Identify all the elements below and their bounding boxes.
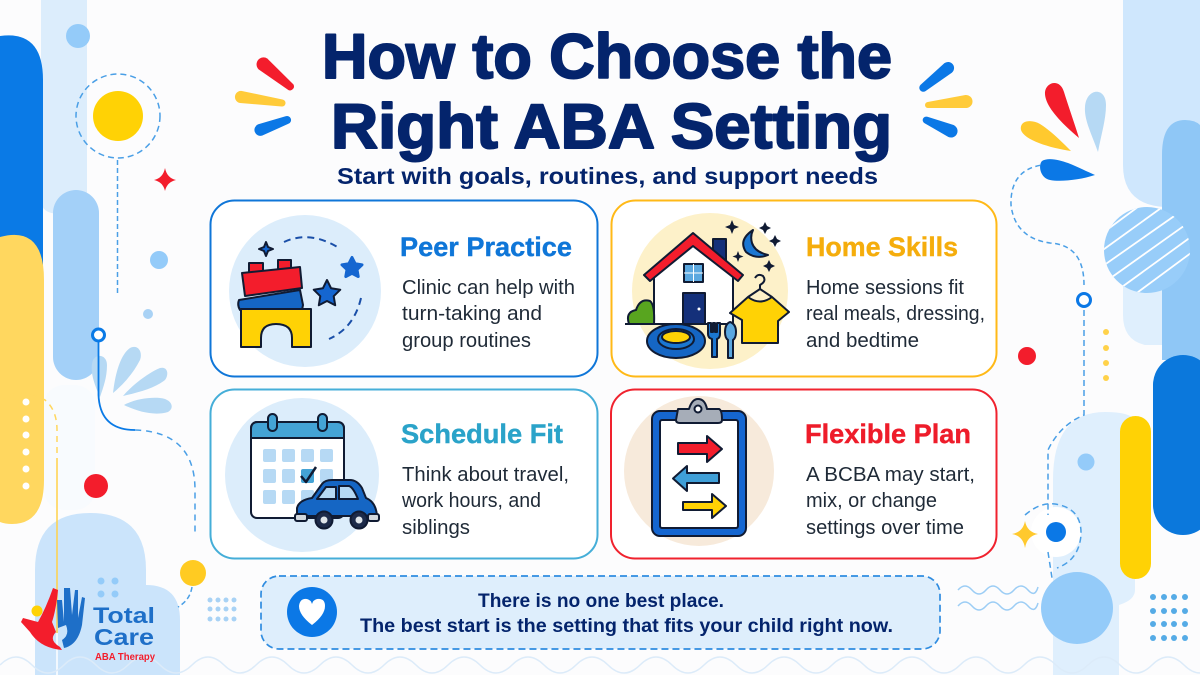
- callout text: [360, 590, 893, 637]
- logo: Total Care ABA Therapy: [21, 588, 155, 663]
- body text: mix, or change: [806, 490, 937, 512]
- body text: [806, 277, 985, 352]
- heading: Flexible Plan: [805, 419, 971, 449]
- body text: turn-taking and: [402, 303, 542, 325]
- body text: [401, 464, 569, 539]
- logo: Total Care ABA Therapy: ABA Therapy: [95, 652, 155, 663]
- panel: home skills: [612, 200, 996, 376]
- body text: Think about travel,: [402, 464, 569, 486]
- body text: [806, 464, 975, 539]
- title: Right ABA Setting: [331, 92, 892, 162]
- heading: Peer Practice: [400, 232, 572, 262]
- icon: toy blocks and stars: [229, 215, 381, 367]
- heading: Home Skills: [806, 232, 958, 262]
- callout banner: [261, 576, 940, 649]
- icon: calendar and car: [225, 398, 379, 552]
- panel: flexible plan: [611, 390, 996, 558]
- heading: Schedule Fit: [401, 419, 563, 449]
- bottom wave decoration: [0, 657, 1200, 673]
- icon: left burst: [235, 57, 294, 136]
- title: How to Choose the: [322, 22, 892, 92]
- subtitle: Start with goals, routines, and support needs: [337, 163, 878, 189]
- logo: Total Care ABA Therapy: Total: [93, 603, 155, 628]
- icon: house with meal and shirt: [625, 213, 789, 369]
- right background shapes: [958, 0, 1200, 675]
- body text: Home sessions fit: [806, 277, 964, 299]
- callout text: There is no one best place.: [478, 590, 724, 612]
- body text: A BCBA may start,: [806, 464, 975, 486]
- body text: [402, 277, 575, 352]
- panel: peer practice: [210, 200, 598, 376]
- callout text: The best start is the setting that fits your child right now.: [360, 615, 893, 637]
- left background shapes: [0, 0, 236, 675]
- title: [322, 22, 892, 162]
- logo: Total Care ABA Therapy: Care: [94, 624, 154, 650]
- body text: group routines: [402, 330, 531, 352]
- icon: heart: [287, 587, 337, 637]
- body text: Clinic can help with: [402, 277, 575, 299]
- body text: real meals, dressing,: [806, 303, 985, 325]
- body text: and bedtime: [806, 330, 919, 352]
- icon: right burst: [919, 62, 973, 138]
- body text: work hours, and: [401, 490, 541, 512]
- panel: schedule fit: [210, 390, 598, 558]
- body text: siblings: [402, 517, 470, 539]
- icon: clipboard with arrows: [624, 396, 774, 546]
- body text: settings over time: [806, 517, 964, 539]
